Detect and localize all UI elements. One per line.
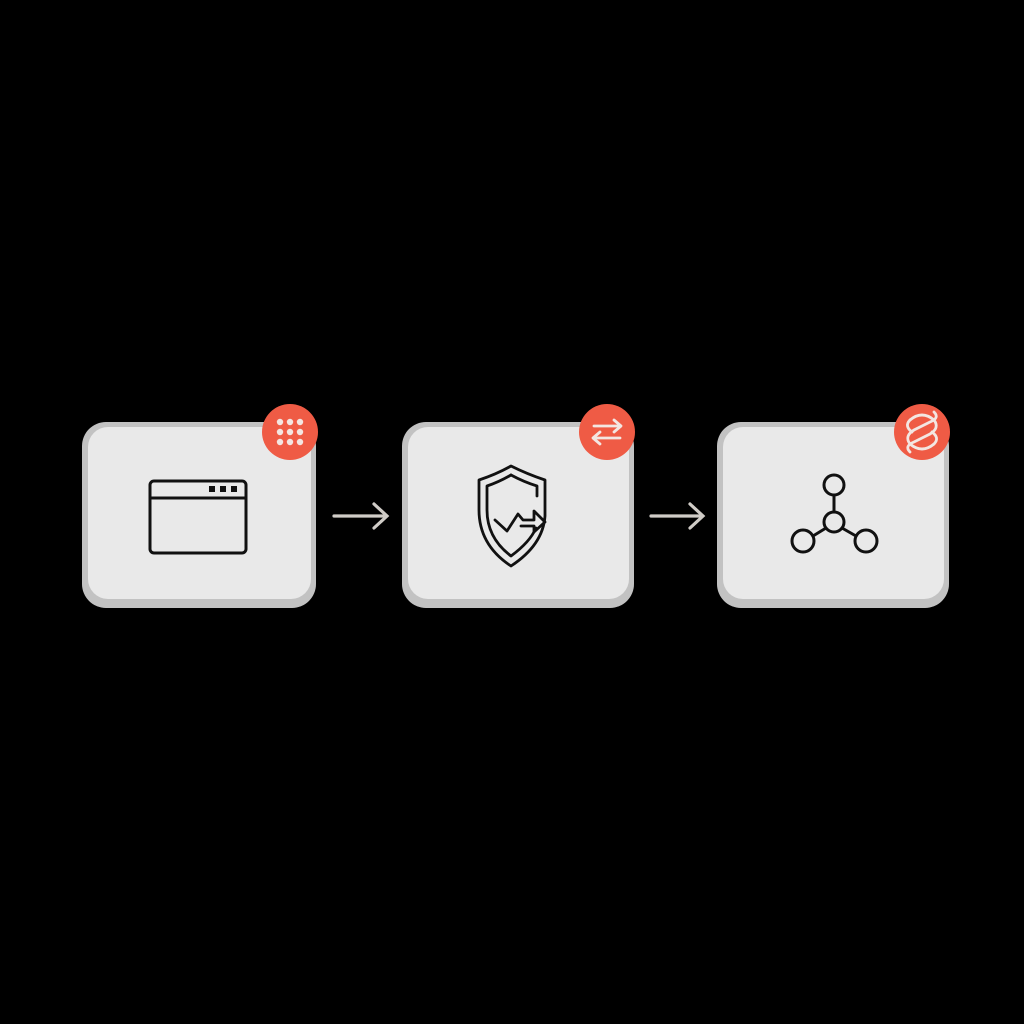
arrow 1 <box>334 504 387 528</box>
badge 3: knot <box>894 404 950 460</box>
icon: shield with arrow <box>479 466 545 566</box>
card 3: network nodes <box>717 422 949 608</box>
arrow 2 <box>651 504 703 528</box>
badge 2: swap arrows <box>579 404 635 460</box>
badge 1: dot grid <box>262 404 318 460</box>
card 1: browser window <box>82 422 316 608</box>
icon: nodes <box>792 475 877 552</box>
icon: browser window <box>150 481 246 553</box>
card 2: shield <box>402 422 634 608</box>
